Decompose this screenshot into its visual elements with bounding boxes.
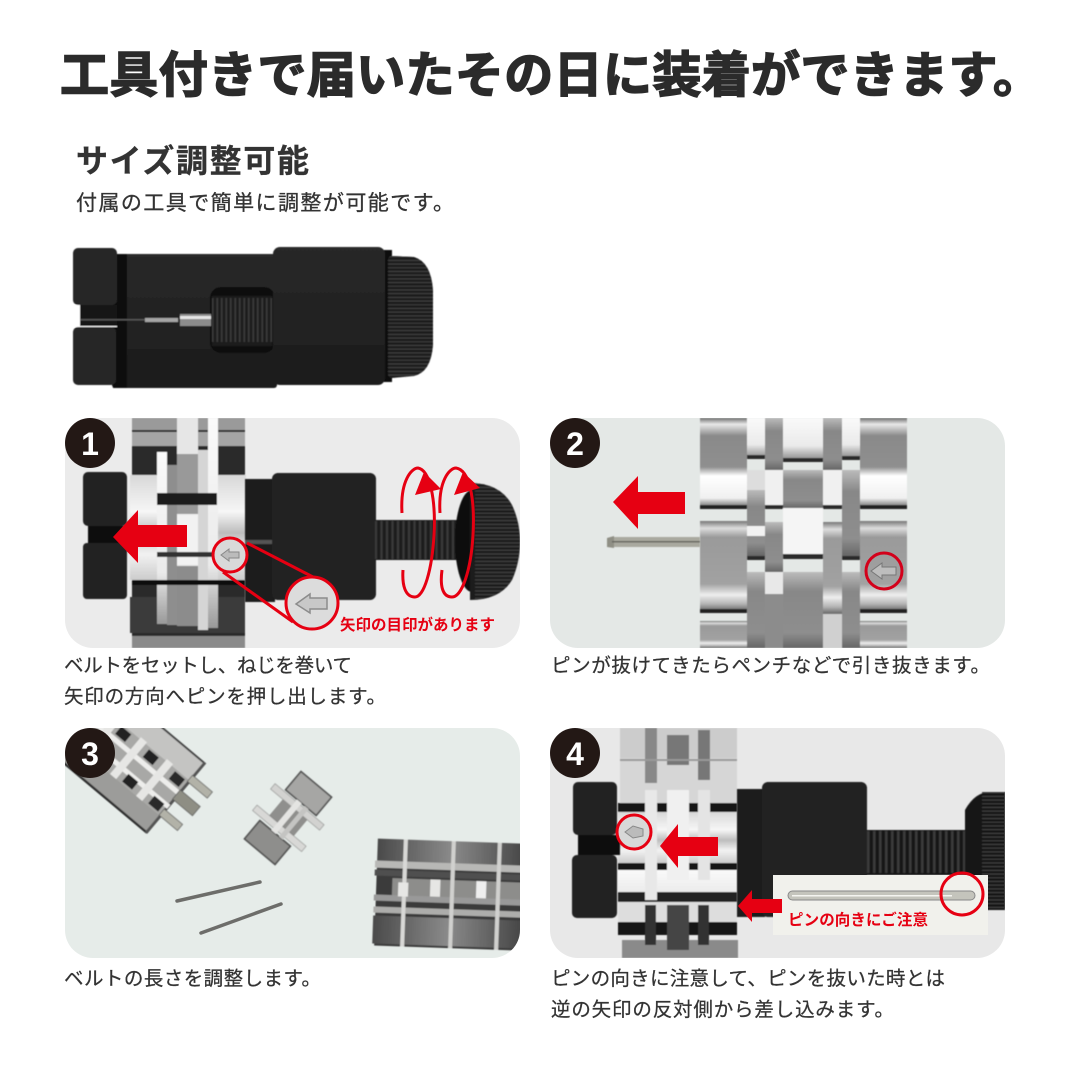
inset: pin direction — [773, 873, 988, 935]
label: pin direction: ピンの向きにご注意 — [788, 910, 928, 929]
badge: step 2 — [550, 418, 600, 468]
badge: step 2: 2 — [566, 426, 584, 462]
label: arrow mark: 矢印の目印があります — [340, 615, 495, 634]
badge: step 3 — [65, 728, 115, 778]
panel: step 3 — [65, 728, 520, 958]
heading: size adjustment: サイズ調整可能 — [76, 143, 309, 179]
arrow: pull direction — [613, 476, 685, 529]
photo: dark band section — [372, 839, 526, 951]
panel: step 4 — [550, 728, 1005, 958]
panel: step 2 — [550, 418, 1005, 648]
caption: step 3: ベルトの長さを調整します。 — [64, 968, 321, 990]
photo: pin removal tool — [73, 247, 433, 388]
caption: step 1 — [64, 655, 386, 708]
caption: step 4: 逆の矢印の反対側から差し込みます。 — [551, 999, 894, 1021]
arrow: pin pointer — [738, 890, 782, 922]
caption: step 1: 矢印の方向へピンを押し出します。 — [64, 686, 386, 708]
intro text: 付属の工具で簡単に調整が可能です。 — [76, 192, 454, 215]
caption: step 4 — [551, 968, 945, 1021]
panel 1 background — [65, 418, 520, 648]
photo: pin — [607, 536, 700, 548]
photo: tool body — [83, 472, 520, 602]
title: 工具付きで届いたその日に装着ができます。 — [60, 49, 1042, 103]
caption: step 1: ベルトをセットし、ねじを巻いて — [64, 655, 352, 677]
panel 2 background — [550, 418, 1005, 648]
photo: removed link — [242, 770, 334, 866]
photo: watch band in tool — [618, 728, 738, 958]
rotation arrows — [402, 468, 480, 597]
panel: step 1 — [65, 418, 520, 648]
callout: arrow mark magnified — [213, 538, 338, 629]
callout: arrow mark circle — [617, 815, 651, 849]
badge: step 1: 1 — [81, 426, 99, 462]
photo: long band section — [65, 728, 214, 834]
panel 4 background — [550, 728, 1005, 958]
photo: watch band — [700, 418, 907, 648]
arrow: push direction — [113, 510, 187, 563]
badge: step 4: 4 — [566, 736, 584, 772]
caption: step 4: ピンの向きに注意して、ピンを抜いた時とは — [551, 968, 945, 990]
badge: step 1 — [65, 418, 115, 468]
photo: tool body — [572, 782, 1005, 918]
badge: step 4 — [550, 728, 600, 778]
panel 3 background — [65, 728, 520, 958]
callout: arrow mark circle — [866, 553, 902, 589]
caption: step 2: ピンが抜けてきたらペンチなどで引き抜きます。 — [551, 655, 990, 677]
photo: loose pins — [177, 882, 281, 933]
badge: step 3: 3 — [81, 736, 99, 772]
photo: watch band in tool — [130, 418, 246, 648]
arrow: insert direction — [660, 824, 718, 868]
